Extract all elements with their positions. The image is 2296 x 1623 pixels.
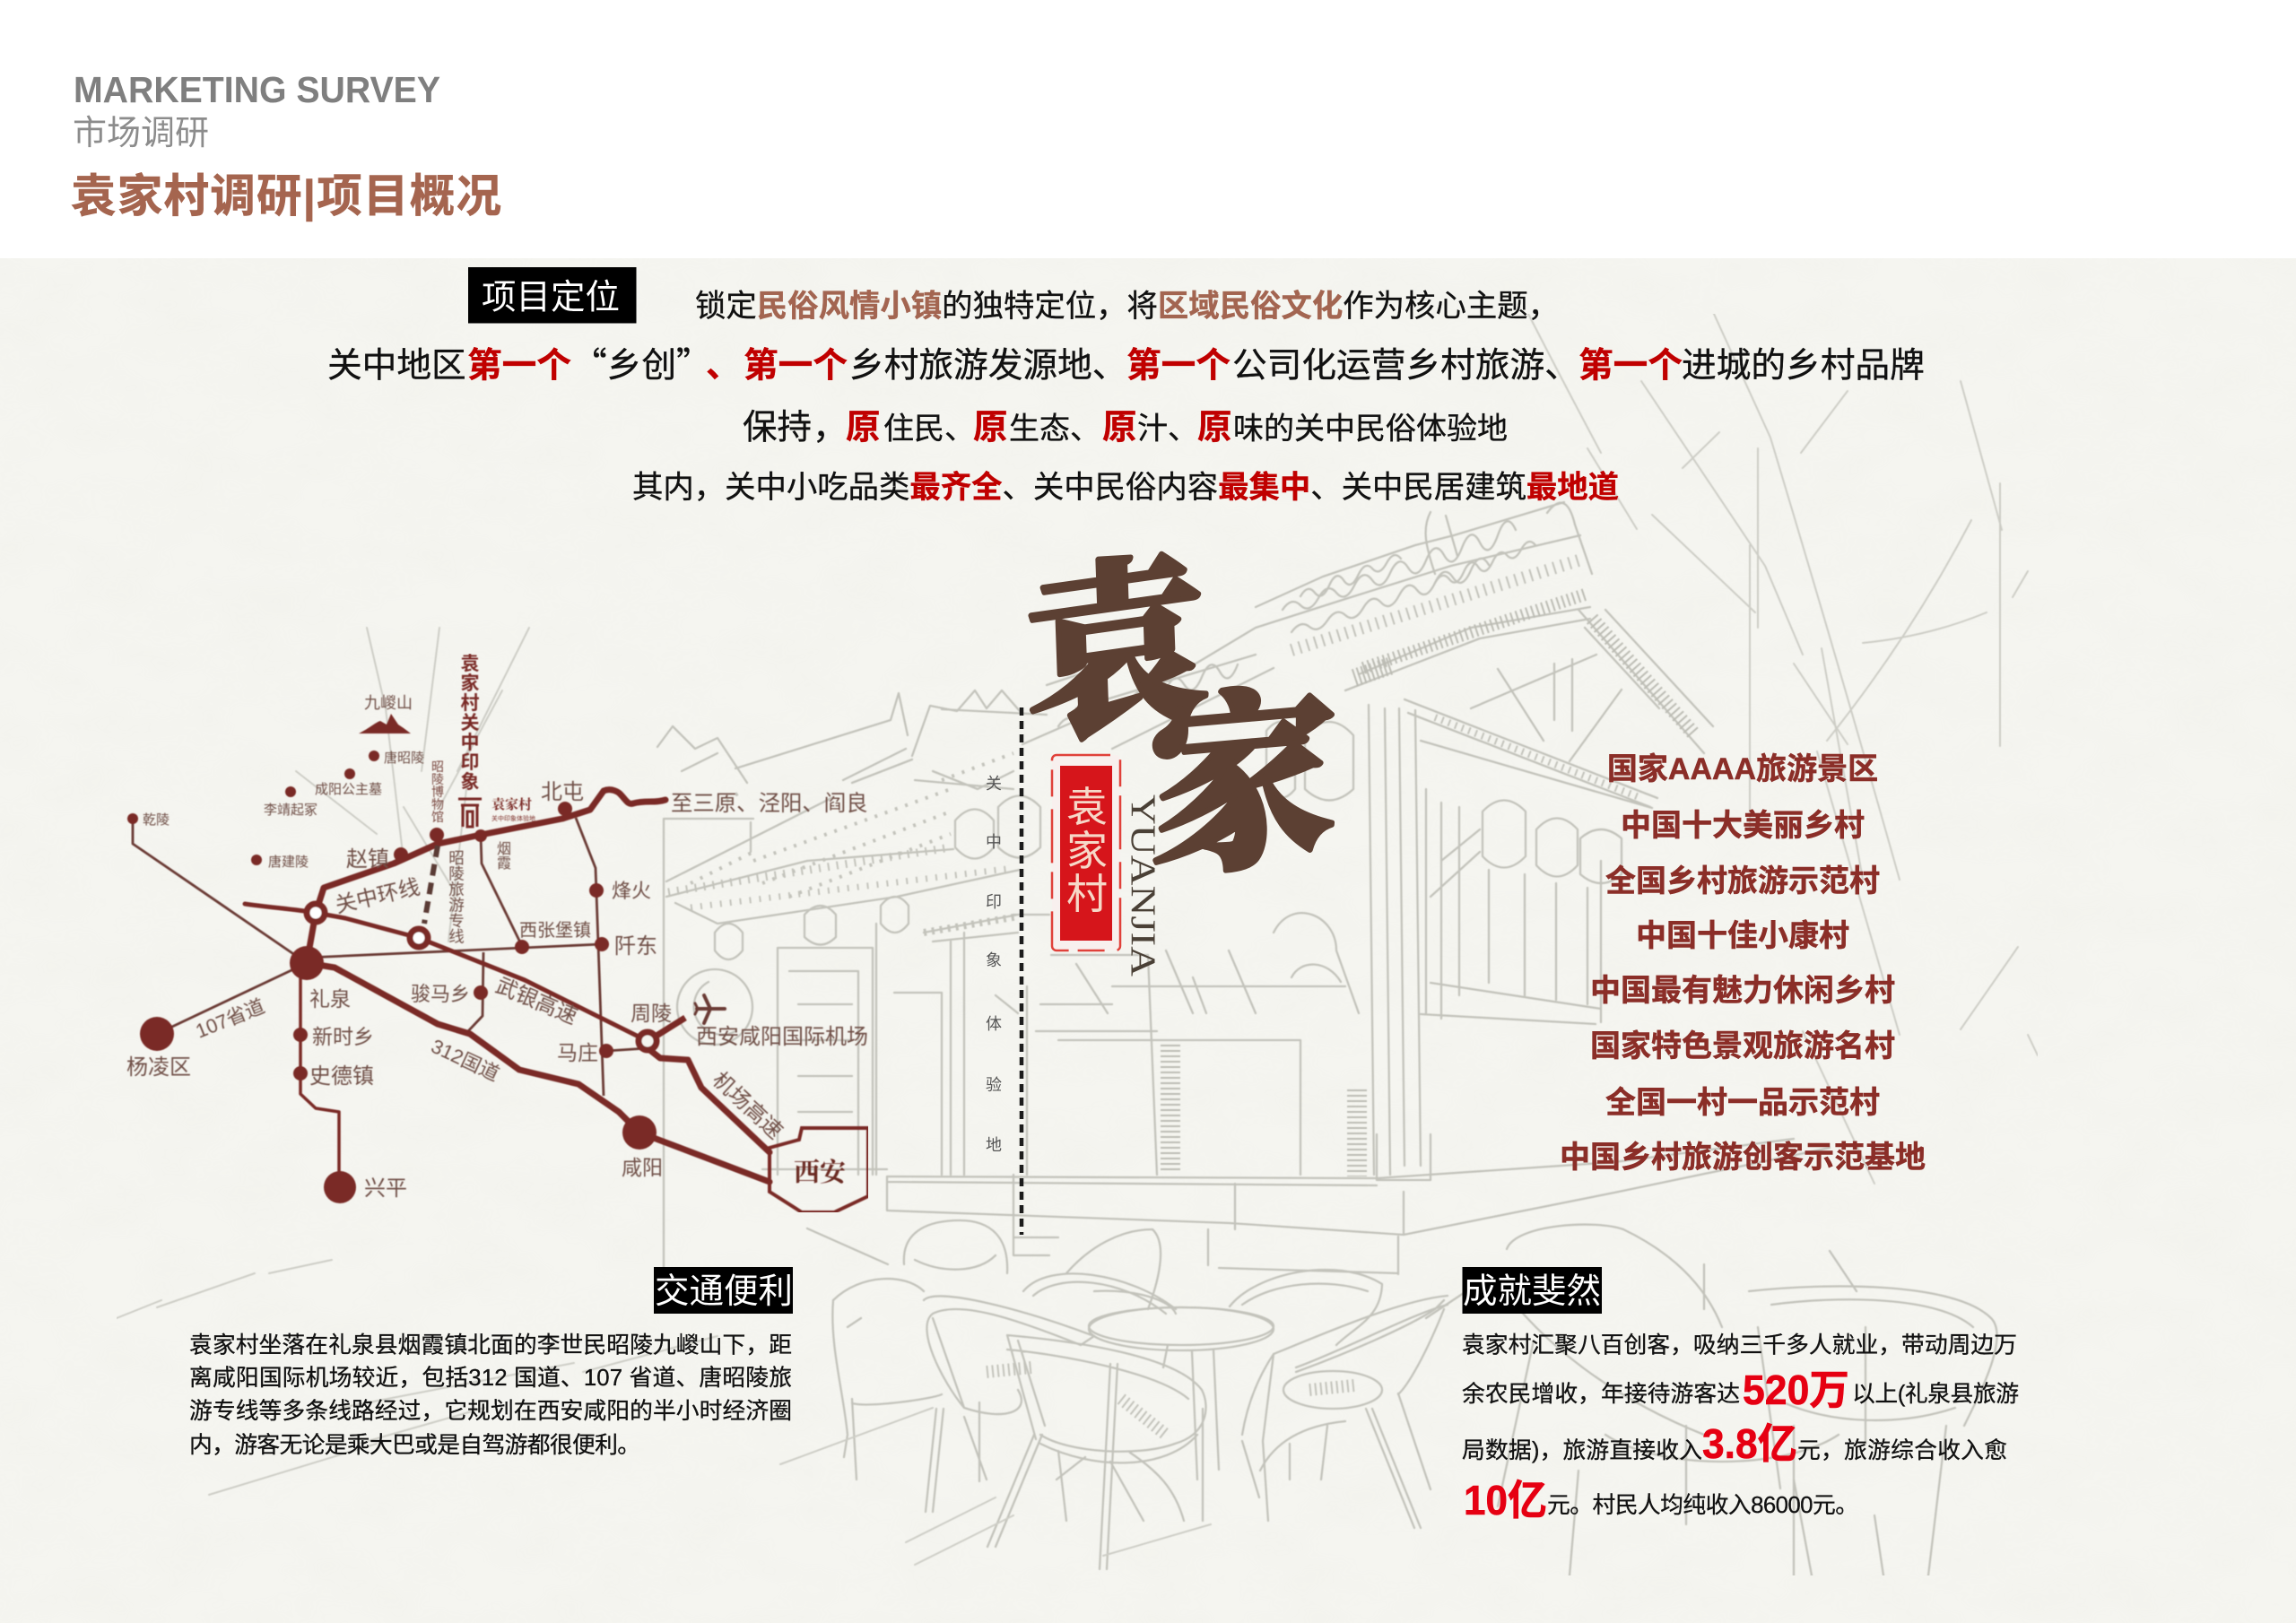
vertical label: Zhaoling tourism line: 专 [448, 912, 465, 930]
map labels: 礼泉 [309, 987, 351, 1011]
vertical label: Yuanjia Guanzhong Impression [461, 654, 479, 793]
thin roads [133, 818, 648, 1172]
positioning text block: 原 [1102, 409, 1137, 447]
red seal: 家 [1066, 828, 1108, 874]
map labels: 李靖起冢 [264, 803, 317, 818]
list of honours: 中国十大美丽乡村 [1621, 809, 1865, 843]
vertical label: Yanxia [497, 841, 511, 872]
dashed divider [1020, 707, 1023, 1235]
positioning text block: 第一个 [467, 347, 571, 386]
vertical label: Yuanjia Guanzhong Impression: 印 [461, 752, 479, 773]
vertical label: Zhaoling tourism line [448, 849, 465, 945]
positioning text block: 汁、 [1137, 412, 1198, 447]
vertical label: Zhaoling museum [431, 759, 444, 824]
vertical label: Yuanjia Guanzhong Impression: 象 [461, 772, 479, 793]
positioning text block: 味的关中民俗体验地 [1233, 412, 1508, 447]
positioning text block: ， [813, 409, 848, 447]
transport map [126, 654, 868, 1212]
map labels: 烽火 [612, 880, 651, 902]
map labels: 杨凌区 [126, 1055, 191, 1080]
vertical text: Guanzhong impression experience site: 关 [986, 775, 1002, 793]
header: page title: 袁家村调研|项目概况 [71, 170, 501, 222]
map labels: 周陵 [631, 1002, 672, 1025]
positioning text block: 锁定民俗风情小镇的独特定位，将区域民俗文化作为核心主题， [695, 290, 1559, 324]
thick roads [245, 790, 770, 1182]
map nodes [127, 751, 657, 1203]
transport paragraph: 内，游客无论是乘大巴或是自驾游都很便利。 [189, 1432, 640, 1458]
achievements paragraph: 3.8亿 [1702, 1420, 1797, 1467]
map labels: 唐建陵 [268, 855, 309, 870]
positioning text block: 乡村旅游发源地、 [849, 347, 1126, 386]
label: Xi'an: 西安 [794, 1152, 848, 1189]
vertical label: Zhaoling tourism line: 昭 [448, 849, 465, 867]
map labels: 西张堡镇 [519, 920, 591, 941]
achievements paragraph: 袁家村汇聚八百创客，吸纳三千多人就业，带动周边万 [1462, 1332, 2017, 1358]
logo: brush characters Yuan Jia: 袁 [1019, 490, 1210, 781]
vertical text: Guanzhong impression experience site: 中 [986, 833, 1002, 851]
list of honours: 国家特色景观旅游名村 [1590, 1029, 1895, 1063]
vertical label: Yuanjia Guanzhong Impression: 中 [461, 733, 479, 753]
list of honours: 全国乡村旅游示范村 [1605, 864, 1880, 898]
achievements paragraph: 10亿 [1464, 1477, 1547, 1523]
positioning text block: 原 [1197, 409, 1232, 447]
positioning text block: 、 [706, 347, 741, 386]
vertical text: Guanzhong impression experience site: 体 [986, 1015, 1002, 1033]
icon: airplane [695, 995, 725, 1023]
logo latin text: YUANJIA: YUANJIA [1124, 794, 1162, 976]
map labels: 武银高速 [492, 974, 581, 1029]
map labels: 史德镇 [309, 1064, 374, 1089]
positioning text block: 关中地区 [327, 347, 466, 386]
map labels: 乾陵 [143, 812, 170, 828]
map labels: 新时乡 [312, 1025, 374, 1048]
positioning text block: 原 [846, 409, 881, 447]
achievements paragraph: 局数据)，旅游直接收入 [1462, 1437, 1702, 1463]
achievements paragraph: 以上(礼泉县旅游 [1852, 1381, 2019, 1407]
vertical text: Guanzhong impression experience site: 印 [986, 893, 1002, 911]
icon: Yuanjia gate logo [458, 799, 482, 827]
vertical label: Zhaoling museum: 物 [431, 797, 444, 812]
achievements paragraph: 余农民增收，年接待游客达 [1462, 1381, 1740, 1407]
map labels: 兴平 [364, 1176, 407, 1201]
map labels: 阡东 [614, 934, 657, 959]
map labels: 赵镇 [346, 847, 389, 872]
transport paragraph: 袁家村坐落在礼泉县烟霞镇北面的李世民昭陵九嵕山下，距 [189, 1332, 792, 1358]
vertical label: Yuanjia Guanzhong Impression: 袁 [461, 654, 479, 674]
header: subtitle: 市场调研 [73, 115, 209, 152]
red seal [1052, 755, 1120, 950]
map labels: 咸阳 [622, 1156, 663, 1179]
achievements paragraph: 元，旅游综合收入愈 [1797, 1437, 2007, 1463]
map labels: 马庄 [557, 1041, 598, 1064]
list of honours: 中国乡村旅游创客示范基地 [1560, 1141, 1926, 1175]
list of honours: 全国一村一品示范村 [1605, 1086, 1880, 1120]
tag: project positioning: 项目定位 [482, 279, 620, 317]
achievements paragraph: 520万 [1743, 1367, 1849, 1413]
positioning text block: “乡创” [572, 338, 711, 388]
vertical text: Guanzhong impression experience site: 象 [986, 951, 1002, 969]
vertical text: Guanzhong impression experience site: 验 [986, 1076, 1002, 1094]
positioning text block [327, 290, 1925, 505]
vertical label: Zhaoling tourism line: 线 [448, 927, 465, 945]
Xi'an city boundary [770, 1128, 868, 1212]
positioning text block: 其内，关中小吃品类最齐全、关中民俗内容最集中、关中民居建筑最地道 [632, 471, 1619, 505]
map labels: 九嵕山 [364, 694, 413, 712]
map labels: 机场高速 [708, 1068, 787, 1144]
vertical label: Zhaoling tourism line: 旅 [448, 881, 465, 898]
vertical text: Guanzhong impression experience site: 地 [986, 1136, 1002, 1154]
list of honours: 国家AAAA旅游景区 [1607, 752, 1878, 786]
map labels: 骏马乡 [411, 983, 470, 1005]
map labels: 312国道 [428, 1035, 503, 1086]
map labels: 关中印象体验地 [491, 814, 535, 822]
tag: achievements: 成就斐然 [1463, 1272, 1601, 1311]
vertical label: Zhaoling museum: 昭 [431, 759, 444, 774]
header: MARKETING SURVEY: MARKETING SURVEY [74, 69, 440, 110]
map labels: 袁家村 [491, 794, 532, 813]
list of honours: 中国十佳小康村 [1636, 919, 1849, 953]
map labels: 成阳公主墓 [315, 782, 382, 797]
vertical text: Guanzhong impression experience site [986, 775, 1002, 1154]
vertical label: Yuanjia Guanzhong Impression: 村 [461, 693, 479, 714]
tag: project positioning [468, 267, 637, 323]
positioning text block: 第一个 [1126, 347, 1231, 386]
positioning text block: 第一个 [1578, 347, 1683, 386]
list of honours [1560, 752, 1926, 1175]
logo: brush characters Yuan Jia [1019, 490, 1337, 914]
transport paragraph: 游专线等多条线路经过，它规划在西安咸阳的半小时经济圈 [189, 1398, 792, 1424]
positioning text block: 原 [973, 409, 1008, 447]
vertical label: Zhaoling museum: 馆 [431, 810, 444, 824]
vertical label: Yuanjia Guanzhong Impression: 家 [461, 673, 479, 694]
map labels [126, 694, 868, 1201]
positioning text block: 住民、 [883, 412, 975, 447]
map labels: 107省道 [193, 994, 268, 1043]
transport paragraph [189, 1332, 792, 1458]
positioning text block: 保持 [743, 409, 812, 447]
map labels: 关中环线 [333, 875, 422, 918]
map labels: 西安咸阳国际机场 [696, 1025, 868, 1049]
icon: mountain [359, 714, 411, 733]
achievements paragraph: 元。村民人均纯收入86000元。 [1547, 1492, 1858, 1518]
map labels: 唐昭陵 [384, 751, 424, 766]
vertical label: Zhaoling museum: 博 [431, 785, 444, 799]
positioning text block: 进城的乡村品牌 [1682, 347, 1925, 386]
logo: brush characters Yuan Jia: 家 [1148, 623, 1337, 914]
list of honours: 中国最有魅力休闲乡村 [1590, 974, 1895, 1008]
red seal: 袁 [1066, 784, 1108, 830]
map labels: 至三原、泾阳、阎良 [671, 792, 868, 816]
transport paragraph: 离咸阳国际机场较近，包括312 国道、107 省道、唐昭陵旅 [189, 1365, 792, 1391]
vertical label: Zhaoling tourism line: 游 [448, 897, 465, 915]
positioning text block: 公司化运营乡村旅游、 [1232, 347, 1579, 386]
map labels: 北屯 [541, 780, 584, 804]
vertical label: Yanxia: 霞 [497, 856, 511, 872]
background sketch: old building, chairs and trees [117, 314, 2038, 1575]
vertical label: Yuanjia Guanzhong Impression: 关 [461, 713, 479, 733]
vertical label: Zhaoling museum: 陵 [431, 772, 444, 786]
vertical label: Yanxia: 烟 [497, 841, 511, 857]
achievements paragraph [1462, 1332, 2019, 1523]
tag: convenient transport: 交通便利 [655, 1272, 793, 1311]
positioning text block: 生态、 [1009, 412, 1100, 447]
positioning text block: 第一个 [744, 347, 848, 386]
red seal: 村 [1066, 871, 1108, 917]
vertical label: Zhaoling tourism line: 陵 [448, 864, 465, 882]
